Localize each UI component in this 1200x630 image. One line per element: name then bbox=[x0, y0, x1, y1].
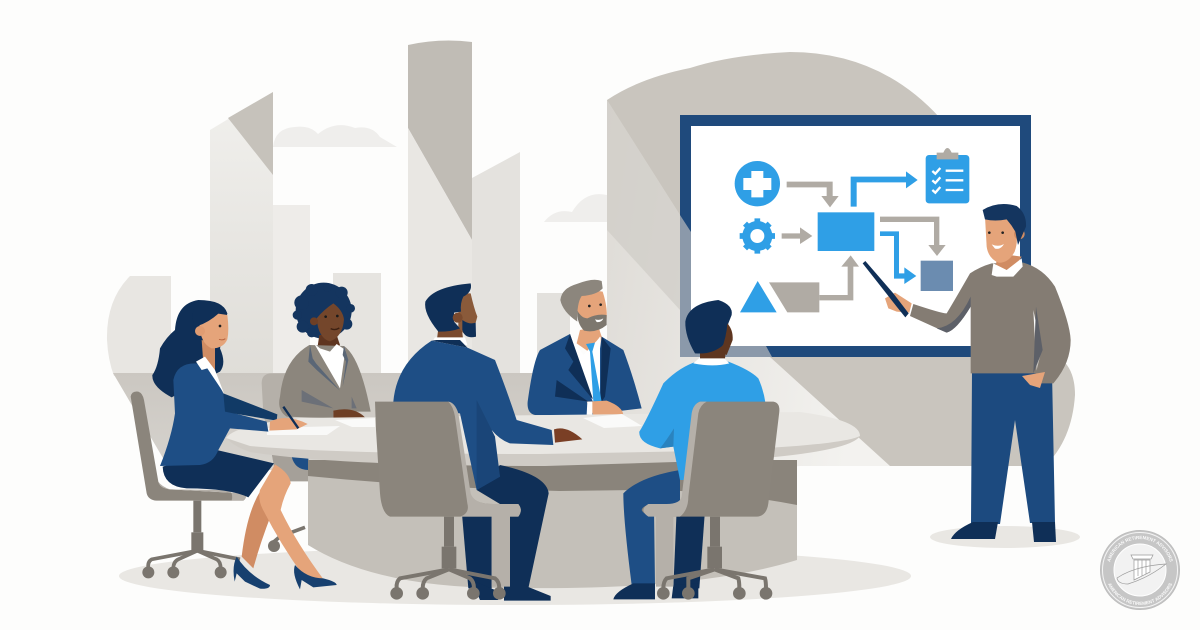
paper bbox=[583, 414, 642, 428]
collar bbox=[693, 357, 729, 365]
output square bbox=[921, 261, 953, 291]
underside shadow bbox=[308, 460, 797, 505]
far leg bbox=[242, 492, 272, 568]
pedestal bbox=[308, 460, 797, 588]
person: man from back in blue shirt with chair bbox=[613, 300, 779, 600]
arrow: plus to box bbox=[787, 182, 839, 207]
shoes bbox=[472, 580, 551, 601]
person: man with gray beard bbox=[528, 280, 642, 415]
arrow: box to checklist bbox=[851, 171, 918, 207]
sweater body bbox=[910, 263, 1071, 383]
pointer bbox=[863, 261, 909, 317]
central process box bbox=[818, 212, 874, 251]
eyes bbox=[588, 303, 602, 307]
triangle bbox=[740, 281, 777, 312]
arrow: gear to box bbox=[782, 227, 812, 244]
trapezoid bbox=[769, 282, 819, 312]
face bbox=[199, 313, 228, 348]
hair fringe bbox=[193, 301, 227, 327]
hand bbox=[554, 428, 582, 443]
presentation screen bbox=[680, 120, 1026, 357]
jacket bbox=[393, 341, 553, 490]
person: presenter bbox=[863, 204, 1071, 542]
icon: column bbox=[1117, 555, 1166, 584]
jacket bbox=[160, 363, 268, 466]
heel left bbox=[234, 557, 270, 589]
hair bbox=[685, 300, 732, 354]
face bbox=[458, 293, 477, 337]
paper bbox=[335, 418, 375, 427]
chair bbox=[642, 402, 779, 517]
hair bbox=[983, 204, 1026, 245]
logo: American Retirement Advisors seal bbox=[1100, 530, 1180, 610]
hair bbox=[152, 300, 227, 397]
icon: plus circle bbox=[735, 161, 780, 206]
floor shadow: table bbox=[119, 547, 911, 605]
far shoe bbox=[672, 583, 698, 598]
cloud bbox=[273, 125, 397, 147]
far leg bbox=[673, 510, 705, 588]
chair bbox=[375, 402, 521, 517]
rim bbox=[226, 436, 860, 466]
trousers bbox=[971, 372, 1055, 524]
icon: clipboard checklist bbox=[926, 148, 969, 203]
hand bbox=[885, 293, 912, 313]
collar bbox=[992, 258, 1023, 277]
person: man from back in navy suit with chair bbox=[375, 283, 582, 601]
face bbox=[985, 217, 1017, 263]
pen bbox=[283, 407, 298, 428]
collar bbox=[432, 337, 467, 345]
right shoe bbox=[1032, 522, 1056, 542]
table top bbox=[226, 412, 860, 454]
near leg bbox=[623, 470, 680, 585]
icon: gear bbox=[740, 218, 775, 254]
neck bbox=[202, 340, 215, 370]
background: city skyline bbox=[107, 41, 607, 376]
beard bbox=[462, 320, 476, 337]
collar bbox=[196, 357, 224, 393]
arrow: box to square blue bbox=[880, 231, 916, 284]
sleeve shadow bbox=[223, 393, 277, 421]
near shoe bbox=[613, 583, 655, 599]
neck bbox=[700, 345, 727, 358]
near leg bbox=[477, 465, 549, 588]
paper bbox=[267, 426, 340, 435]
chair bbox=[131, 392, 305, 578]
near leg bbox=[259, 464, 324, 580]
shirt bbox=[639, 362, 767, 480]
person: woman in navy suit with chair bbox=[131, 300, 337, 589]
smile bbox=[992, 244, 1004, 249]
ear bbox=[453, 313, 463, 323]
person: woman with afro bbox=[262, 283, 371, 481]
far leg bbox=[462, 510, 492, 588]
neck bbox=[437, 327, 463, 342]
skirt bbox=[163, 450, 274, 497]
background: large curved wall bbox=[607, 52, 1075, 470]
neck bbox=[996, 253, 1022, 270]
arm shadow bbox=[937, 297, 971, 333]
arrow: box to square gray bbox=[880, 217, 946, 256]
flowchart bbox=[735, 148, 969, 312]
logo: American Retirement Advisors seal: AMERICAN RETIREMENT ADVISORS bbox=[1108, 583, 1172, 605]
background: floor band bbox=[113, 373, 640, 470]
heel right bbox=[294, 565, 337, 589]
left shoe bbox=[951, 522, 998, 539]
eyes bbox=[988, 231, 1004, 234]
floor shadow: presenter bbox=[930, 526, 1080, 548]
face side bbox=[721, 323, 733, 355]
pocket hand bbox=[1022, 372, 1045, 388]
conference table bbox=[226, 412, 860, 588]
hair bbox=[425, 283, 471, 332]
arrow: trapezoid to box bbox=[819, 255, 859, 300]
hand bbox=[269, 418, 308, 431]
logo: American Retirement Advisors seal: AMERICAN RETIREMENT ADVISORS bbox=[1108, 536, 1173, 562]
